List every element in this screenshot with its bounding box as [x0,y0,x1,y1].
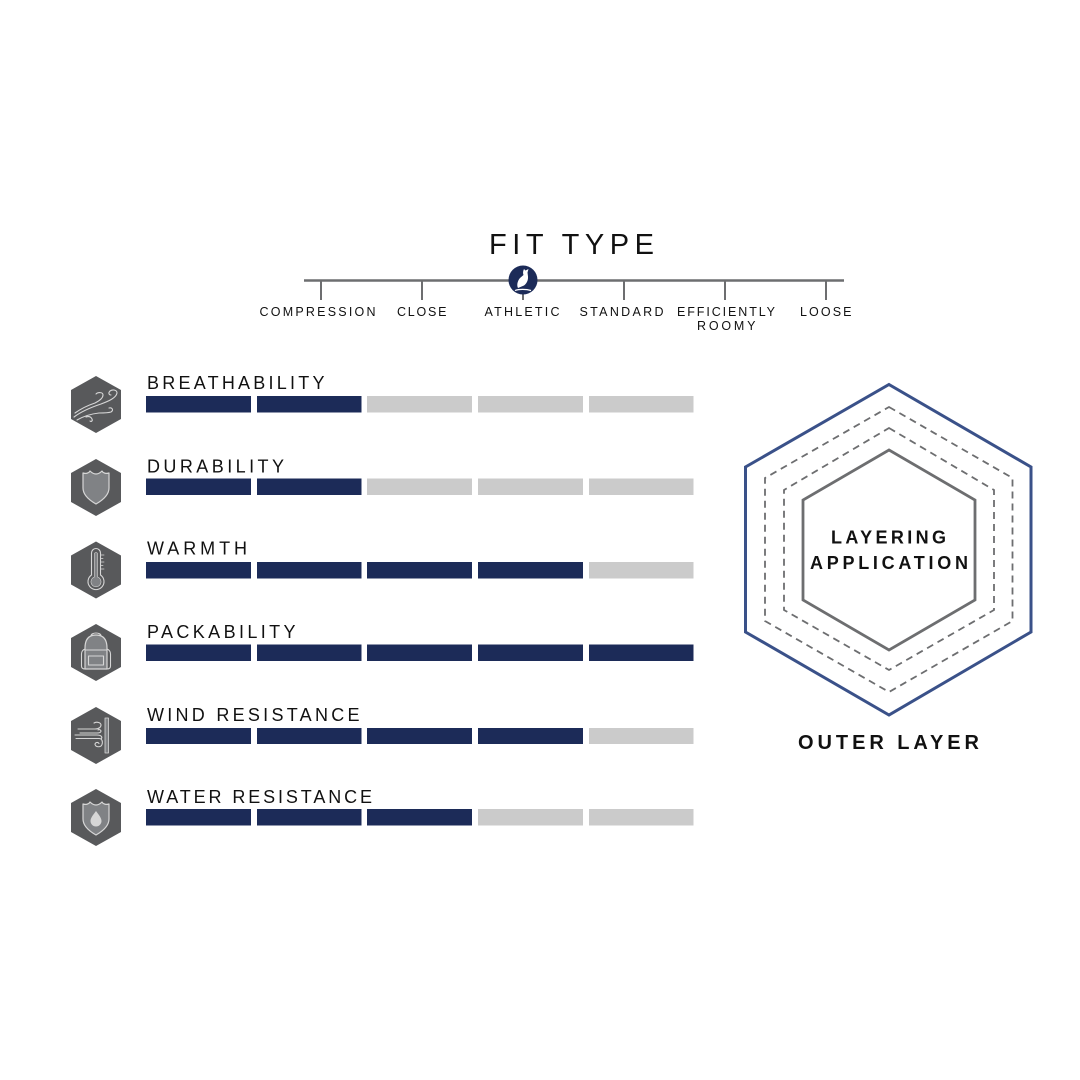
label: wind resistance: WIND RESISTANCE [147,705,360,725]
fit scale labels: ATHLETIC [484,305,560,319]
rating bar: 4 of 5 [146,728,694,744]
row: breathability [71,373,694,433]
rating bar: 2 of 5 [146,478,694,495]
icon: water resistance shield [71,789,121,846]
label: warmth: WARMTH [147,538,247,558]
caption: outer layer: OUTER LAYER [798,732,980,754]
row: wind resistance [71,705,694,764]
rating bar: 4 of 5 [146,562,694,578]
label: breathability: BREATHABILITY [147,373,324,393]
fit scale axis [304,280,844,300]
label: water resistance: WATER RESISTANCE [147,787,372,807]
row: packability [71,622,694,681]
fit scale labels [260,305,852,333]
fit scale labels: COMPRESSION [260,305,376,319]
inner layer hexagon [803,450,975,650]
row: water resistance [71,787,694,846]
heading: fit type: FIT TYPE [489,229,654,261]
dashed layer hexagon: inner [784,428,994,670]
fit scale labels: CLOSE [397,305,446,319]
icon: durability shield [71,459,121,516]
center label: layering application [810,528,968,573]
panel: fit type [260,229,852,333]
panel: layering application [746,384,1031,754]
center label: layering application: APPLICATION [810,553,968,573]
row: durability [71,456,694,516]
label: durability: DURABILITY [147,456,284,476]
fit scale labels: EFFICIENTLY [677,305,776,319]
center label: layering application: LAYERING [831,528,946,548]
icon: warmth thermometer [71,542,121,598]
fit scale labels: ROOMY [697,319,756,333]
rating bar: 2 of 5 [146,396,694,412]
icon: breathability wind swirls [71,376,121,433]
fit scale labels: STANDARD [580,305,664,319]
row: warmth [71,538,694,598]
icon: wind resistance [71,707,121,764]
dashed layer hexagon: outer [765,407,1012,692]
rating bar: 5 of 5 [146,644,694,661]
label: packability: PACKABILITY [147,622,296,642]
icon: owl marker on athletic [508,266,538,294]
icon: packability backpack [71,624,121,681]
outer layer hexagon [746,384,1031,715]
rating bar: 3 of 5 [146,809,694,826]
fit scale labels: LOOSE [800,305,852,319]
